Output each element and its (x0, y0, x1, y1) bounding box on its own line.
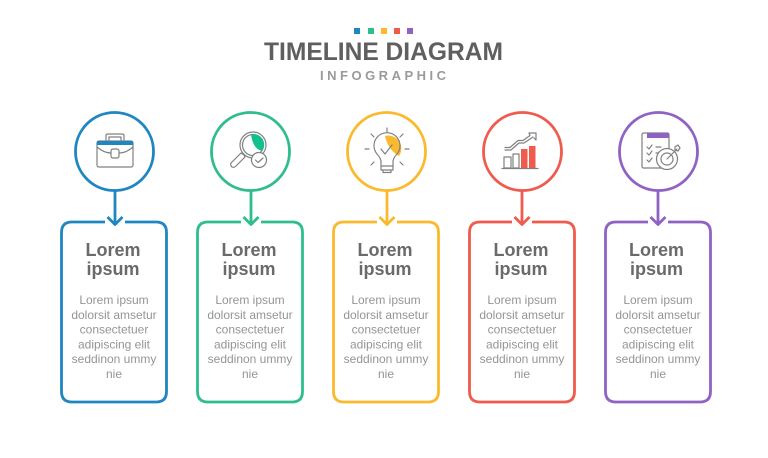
subtitle: INFOGRAPHIC (320, 68, 447, 83)
body text 5: adipiscing elit (622, 338, 695, 352)
body text 5: dolorsit amsetur (615, 308, 701, 322)
panel: step 5 (606, 112, 710, 402)
body text 3: adipiscing elit (350, 338, 423, 352)
circle 2 (212, 112, 290, 190)
heading 1: ipsum (86, 259, 140, 279)
panel: step 2 (198, 112, 302, 402)
connector arrow 3 (380, 191, 394, 224)
circle 3 (348, 112, 426, 190)
panel: step 1 (62, 112, 166, 402)
connector arrow 2 (244, 191, 258, 224)
body text 2: Lorem ipsum (215, 293, 285, 307)
box 3 (334, 222, 438, 402)
connector arrow 4 (514, 191, 530, 224)
box 1 (62, 222, 166, 402)
connector arrow 1 (108, 191, 122, 224)
body text 2: nie (242, 367, 258, 381)
body text 5: consectetuer (624, 322, 692, 336)
body text 5: Lorem ipsum (623, 293, 693, 307)
heading 4: ipsum (494, 259, 548, 279)
body text 4: seddinon ummy (480, 352, 564, 366)
body text 4: Lorem ipsum (487, 293, 557, 307)
body text 1: nie (106, 367, 122, 381)
icon: checklist with target (642, 133, 680, 170)
circle 5 (620, 112, 698, 190)
icon: briefcase (97, 134, 133, 167)
body text 4: nie (514, 367, 530, 381)
body text 2: dolorsit amsetur (207, 308, 293, 322)
panel: step 3 (334, 112, 438, 402)
body text 4: consectetuer (488, 322, 556, 336)
body text 2: adipiscing elit (214, 338, 287, 352)
body text 2: consectetuer (216, 322, 284, 336)
heading 3: ipsum (358, 259, 412, 279)
heading 5: Lorem (629, 240, 684, 260)
icon: rising bar chart (502, 133, 538, 168)
title: TIMELINE DIAGRAM (264, 38, 503, 66)
body text 3: seddinon ummy (344, 352, 428, 366)
heading 2: Lorem (221, 240, 277, 260)
box 4 (470, 222, 574, 402)
body text 5: nie (650, 367, 666, 381)
body text 2: seddinon ummy (208, 352, 292, 366)
body text 1: dolorsit amsetur (71, 308, 157, 322)
heading 2: ipsum (222, 259, 276, 279)
circle 4 (484, 112, 562, 190)
body text 3: consectetuer (352, 322, 420, 336)
body text 5: seddinon ummy (616, 352, 700, 366)
body text 1: Lorem ipsum (79, 293, 149, 307)
body text 1: seddinon ummy (72, 352, 156, 366)
heading 1: Lorem (85, 240, 141, 260)
heading 3: Lorem (357, 240, 413, 260)
heading 5: ipsum (630, 259, 683, 279)
body text 1: adipiscing elit (78, 338, 151, 352)
body text 4: adipiscing elit (486, 338, 559, 352)
panel: step 4 (470, 112, 574, 402)
header color squares (354, 28, 413, 34)
body text 4: dolorsit amsetur (479, 308, 565, 322)
heading 4: Lorem (493, 240, 549, 260)
body text 3: nie (378, 367, 394, 381)
connector arrow 5 (650, 191, 666, 224)
icon: light bulb with check (365, 128, 409, 172)
box 2 (198, 222, 302, 402)
body text 3: Lorem ipsum (351, 293, 421, 307)
icon: magnifier with check (231, 132, 266, 168)
body text 1: consectetuer (80, 322, 148, 336)
box 5 (606, 222, 710, 402)
circle 1 (76, 112, 154, 190)
body text 3: dolorsit amsetur (343, 308, 429, 322)
